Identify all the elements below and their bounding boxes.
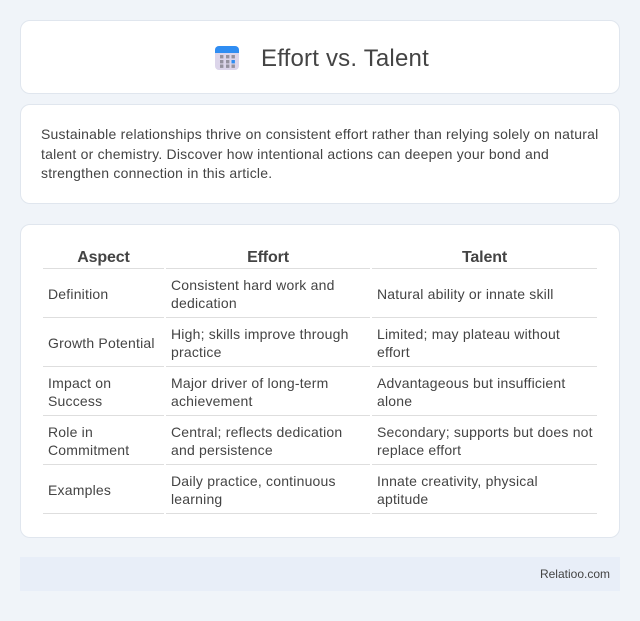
row: Role in Commitment: Commitment bbox=[48, 442, 129, 458]
footer bar bbox=[20, 557, 620, 591]
Examples: talent: aptitude bbox=[377, 491, 428, 507]
Role in Commitment: effort bbox=[171, 424, 342, 458]
row: Examples: Examples bbox=[48, 482, 111, 498]
intro text: talent or chemistry. Discover how intentional actions can deepen your bond and bbox=[41, 146, 549, 162]
icon: calendar bbox=[215, 46, 239, 70]
Examples: effort: Daily practice, continuous bbox=[171, 473, 336, 489]
Examples: talent bbox=[377, 473, 538, 507]
row: Definition: Definition bbox=[48, 286, 108, 302]
Examples: talent: Innate creativity, physical bbox=[377, 473, 538, 489]
footer credit: Relatioo.com bbox=[540, 567, 610, 581]
Definition: effort: Consistent hard work and bbox=[171, 277, 335, 293]
Impact on Success: talent bbox=[377, 375, 566, 409]
row: Impact on Success: Impact on bbox=[48, 375, 111, 391]
title: Effort vs. Talent bbox=[261, 45, 429, 72]
Impact on Success: talent: Advantageous but insufficient bbox=[377, 375, 565, 391]
Role in Commitment: talent bbox=[377, 424, 593, 458]
Impact on Success: talent: alone bbox=[377, 393, 412, 409]
Growth Potential: talent bbox=[377, 326, 560, 360]
row: Growth Potential: Growth Potential bbox=[48, 335, 155, 351]
intro text panel bbox=[20, 104, 620, 204]
row: Role in Commitment: Role in bbox=[48, 424, 93, 440]
Growth Potential: effort: High; skills improve through bbox=[171, 326, 349, 342]
Impact on Success: effort bbox=[171, 375, 328, 409]
Growth Potential: talent: Limited; may plateau without bbox=[377, 326, 560, 342]
column heading: Talent: Talent bbox=[462, 249, 507, 266]
Role in Commitment: talent: replace effort bbox=[377, 442, 461, 458]
Examples: effort bbox=[171, 473, 336, 507]
row: Impact on Success bbox=[48, 375, 111, 409]
header panel bbox=[20, 20, 620, 94]
Role in Commitment: talent: Secondary; supports but does not bbox=[377, 424, 593, 440]
row: Role in Commitment bbox=[48, 424, 130, 458]
table panel bbox=[20, 224, 620, 538]
Impact on Success: effort: Major driver of long-term bbox=[171, 375, 328, 391]
Growth Potential: effort: practice bbox=[171, 344, 222, 360]
Role in Commitment: effort: and persistence bbox=[171, 442, 273, 458]
Growth Potential: effort bbox=[171, 326, 349, 360]
Impact on Success: effort: achievement bbox=[171, 393, 253, 409]
Definition: effort: dedication bbox=[171, 295, 237, 311]
Examples: effort: learning bbox=[171, 491, 222, 507]
row: Impact on Success: Success bbox=[48, 393, 102, 409]
Definition: effort bbox=[171, 277, 335, 311]
Definition: talent: Natural ability or innate skill bbox=[377, 286, 554, 302]
intro text: Sustainable relationships thrive on consistent effort rather than relying solely on natural bbox=[41, 126, 598, 142]
Role in Commitment: effort: Central; reflects dedication bbox=[171, 424, 342, 440]
Growth Potential: talent: effort bbox=[377, 344, 410, 360]
column heading: Aspect: Aspect bbox=[77, 249, 130, 266]
column heading: Effort: Effort bbox=[247, 249, 289, 266]
intro text: strengthen connection in this article. bbox=[41, 165, 272, 181]
intro text bbox=[41, 126, 598, 181]
